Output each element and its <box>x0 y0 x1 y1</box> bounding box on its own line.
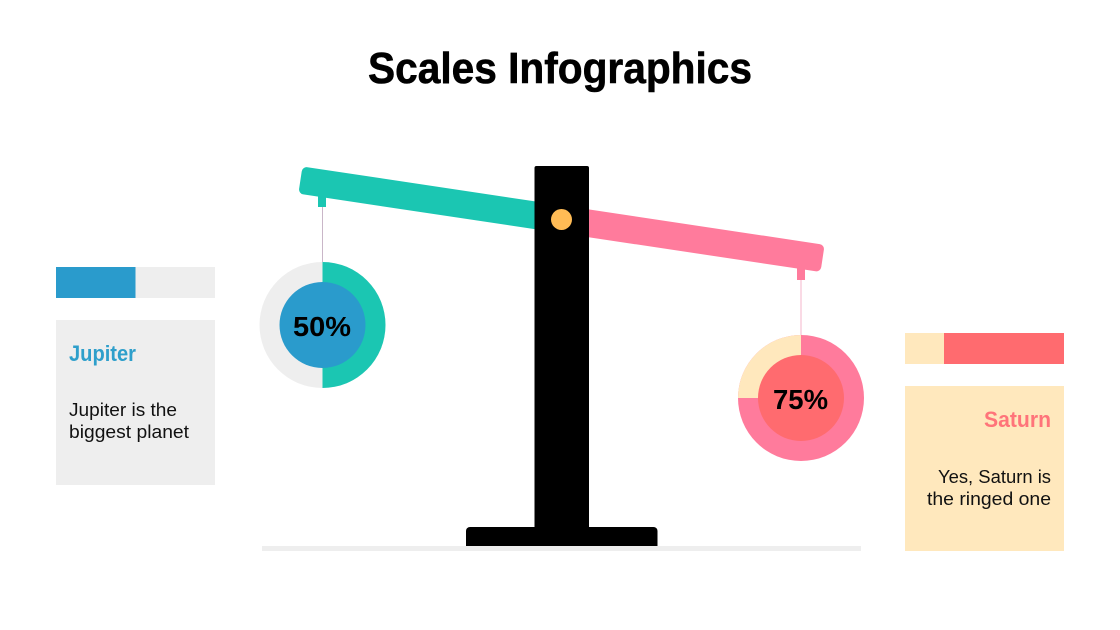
text: Saturn description: the ringed one <box>927 488 1051 509</box>
title: Scales Infographics <box>368 45 752 93</box>
progress bar: Jupiter <box>56 267 215 298</box>
heading: Saturn: Saturn <box>984 407 1051 432</box>
ground line <box>262 546 861 551</box>
donut: 75% <box>738 335 864 461</box>
label: 50%: 50% <box>293 311 351 342</box>
text: Jupiter description <box>69 399 189 442</box>
text: Jupiter description: Jupiter is the <box>69 399 177 420</box>
panel: Jupiter <box>56 320 215 485</box>
scale beam: teal left arm <box>299 167 534 230</box>
text: Saturn description: Yes, Saturn is <box>938 466 1051 487</box>
scale stand: pillar and base <box>466 166 658 546</box>
pivot dot <box>551 209 572 230</box>
text: Saturn description <box>927 466 1051 509</box>
donut: 50% <box>260 262 386 388</box>
progress bar: Saturn <box>905 333 1064 364</box>
left hanger: teal tab and string <box>318 190 326 263</box>
text: Jupiter description: biggest planet <box>69 421 189 442</box>
scale beam: pink right arm <box>589 210 824 272</box>
panel: Saturn <box>905 386 1064 551</box>
right hanger: pink tab and string <box>797 265 805 336</box>
label: 75%: 75% <box>773 384 828 415</box>
heading: Jupiter: Jupiter <box>69 341 136 366</box>
